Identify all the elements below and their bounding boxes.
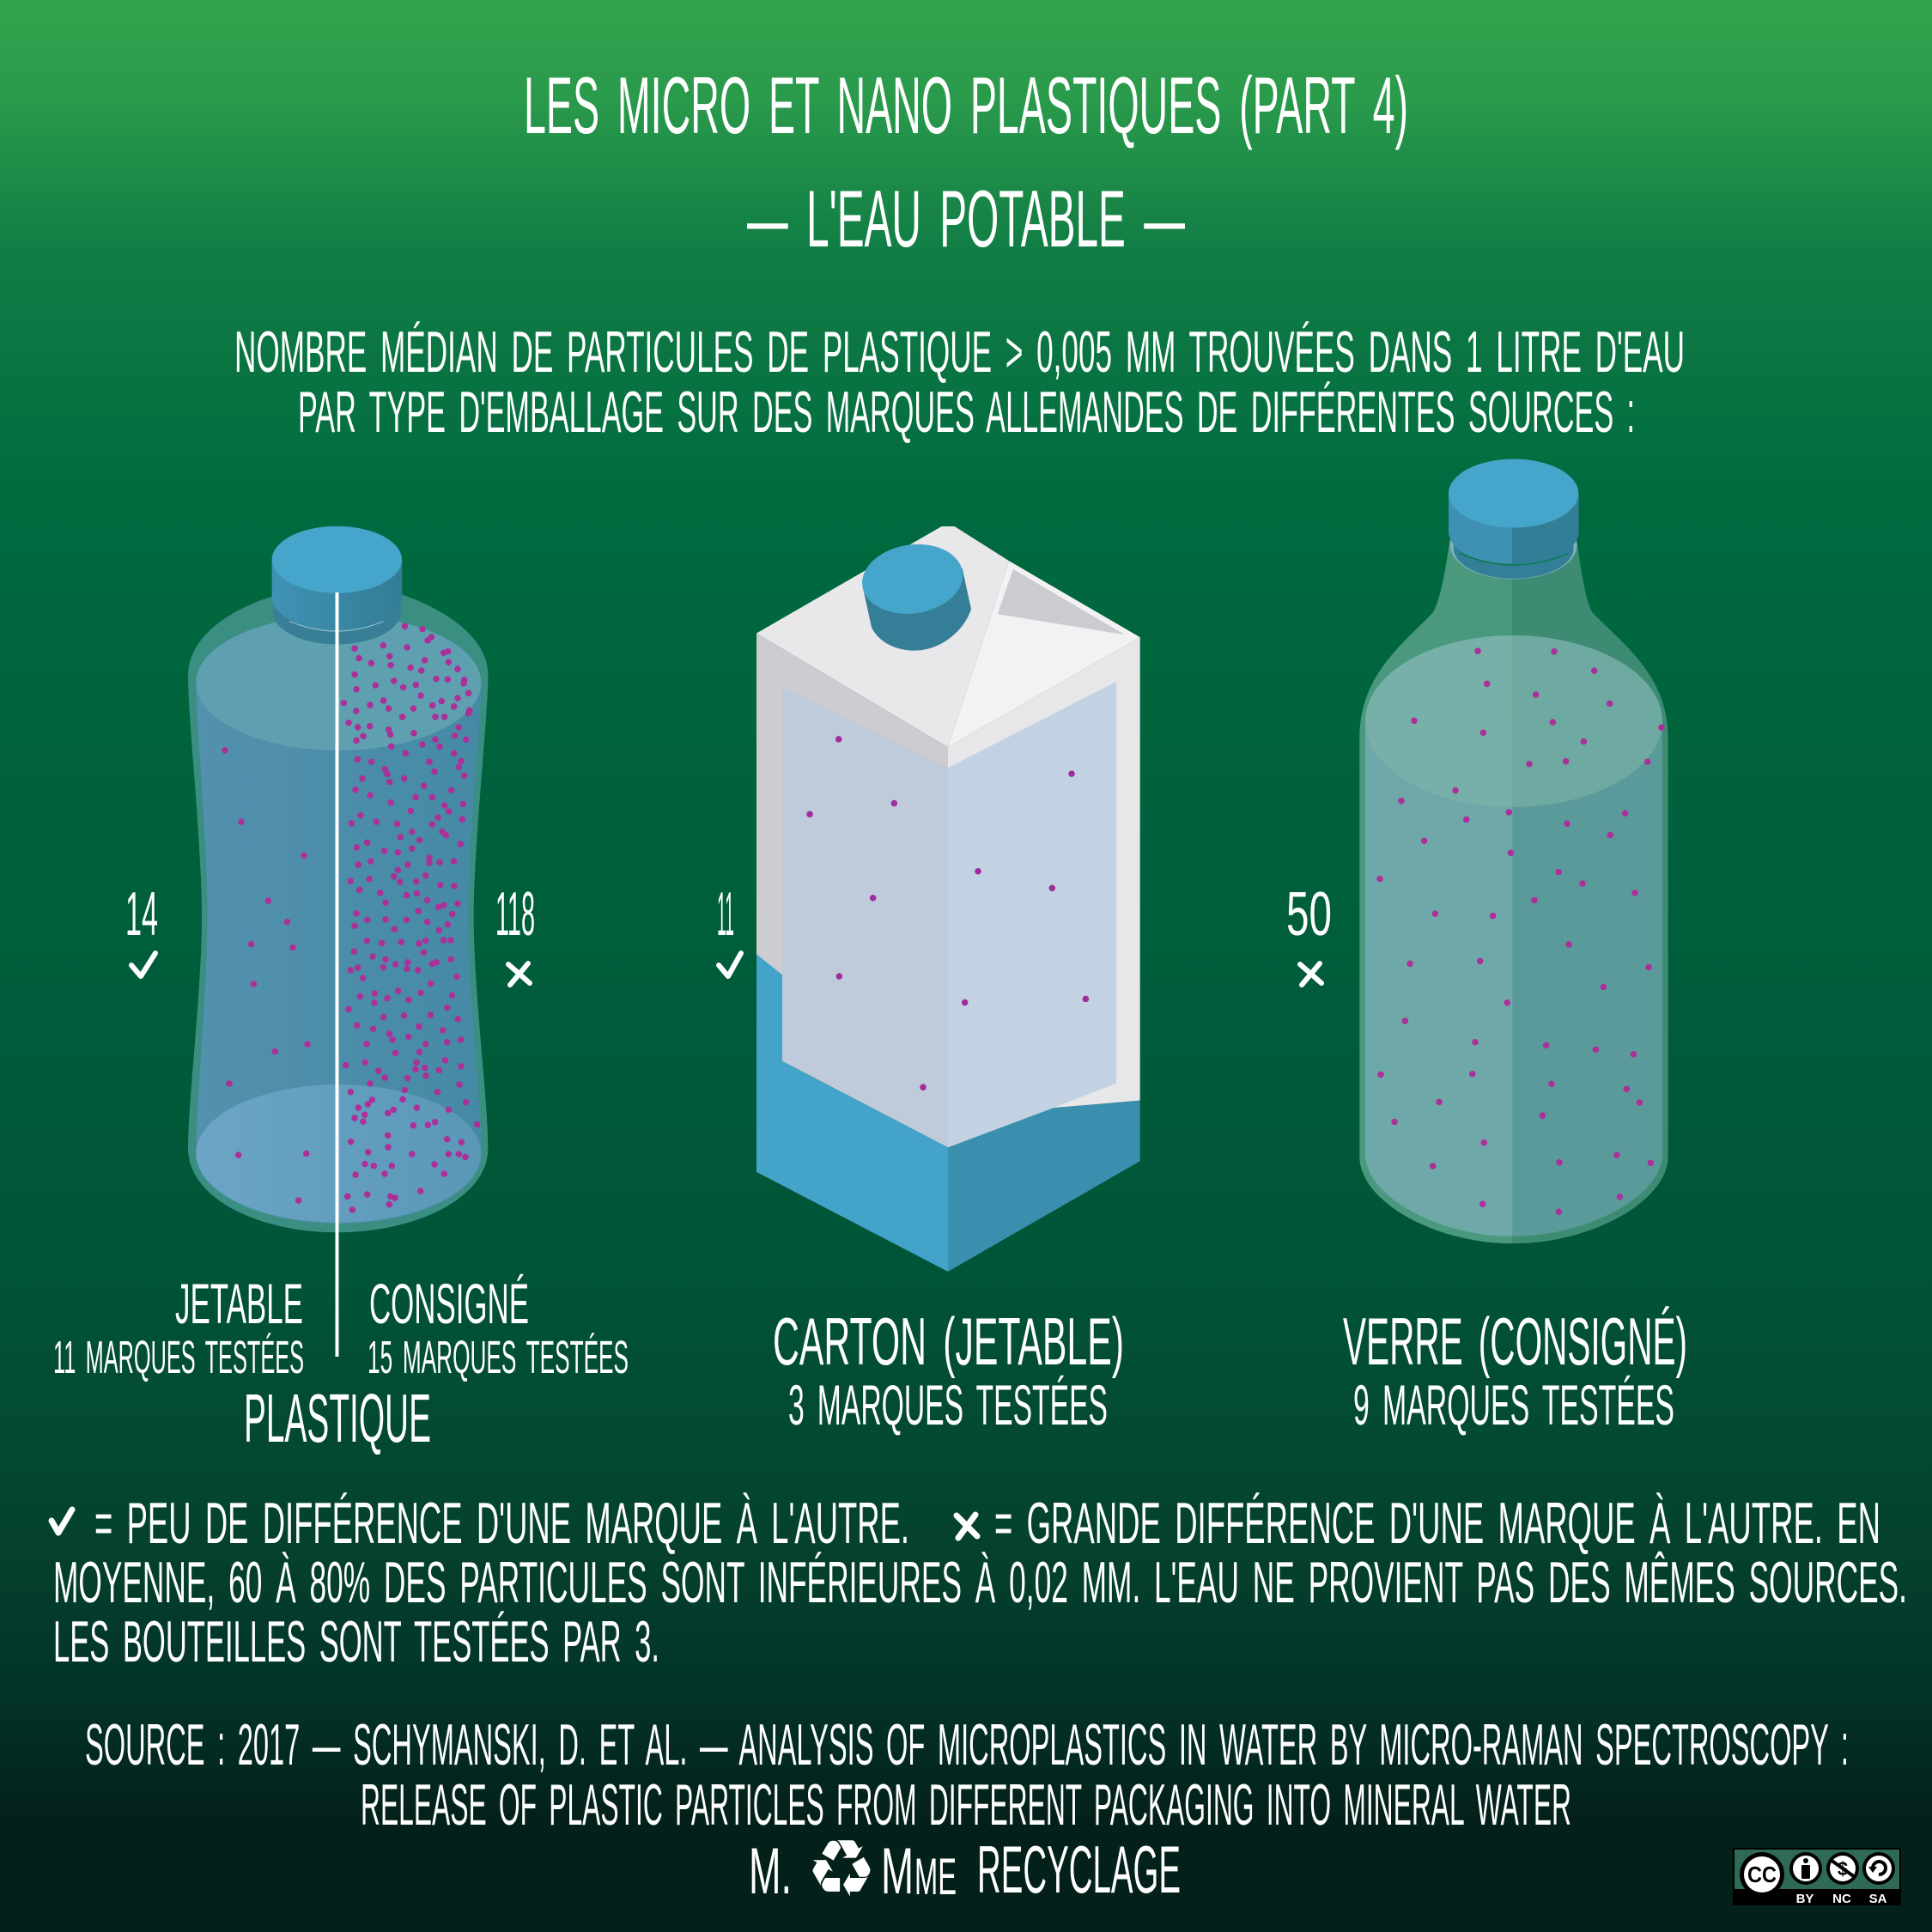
number: 50 with cross: [1286, 880, 1332, 985]
carton cap top: [861, 540, 963, 618]
icon: creative commons licence badge: NC: [1832, 1892, 1851, 1906]
glass collar inner: [1454, 517, 1574, 579]
legend and notes text block: [52, 1491, 1907, 1674]
glass shell left: [1359, 540, 1513, 1243]
label: carton: CARTON (JETABLE): [773, 1303, 1124, 1379]
title: — L'EAU POTABLE —: [747, 173, 1185, 264]
particles: disposable plastic: [225, 750, 307, 1200]
signature: m. mme recyclage: M: [881, 1835, 914, 1908]
icon: creative commons licence badge: BY: [1796, 1892, 1814, 1906]
window left: [782, 687, 948, 1147]
divider line between disposable and returnable: [335, 592, 338, 1357]
glass cap rim line: [1460, 553, 1569, 565]
text: 118: [495, 880, 535, 949]
roof fold: [998, 569, 1125, 635]
number: 118 with cross: [495, 880, 535, 985]
water right: [948, 1101, 1140, 1272]
window right: [948, 682, 1116, 1147]
label: plastic jetable: JETABLE: [175, 1272, 303, 1335]
text: RECYCLAGE: [977, 1832, 1181, 1907]
number: 50 with cross: 50: [1286, 880, 1332, 949]
text: 15 MARQUES TESTÉES: [368, 1332, 629, 1383]
number: 14 with check: [125, 880, 158, 976]
water body: [196, 682, 482, 1224]
text: 11: [717, 880, 734, 949]
bottle cap top: [272, 526, 402, 593]
bottle cap side: [272, 560, 402, 630]
title: [524, 60, 1408, 264]
subtitle text block: [234, 319, 1685, 445]
legend and notes text block: = PEU DE DIFFÉRENCE D'UNE MARQUE À L'AUTRE.: [94, 1491, 909, 1556]
glass cap side left: [1449, 494, 1512, 565]
carton right side: [948, 637, 1140, 1147]
glass collar: [1450, 512, 1577, 580]
number: 11 with check: [717, 880, 741, 976]
particles: glass: [1380, 651, 1662, 1212]
particles: returnable plastic: [343, 626, 477, 1210]
icon: creative commons licence badge: [1733, 1848, 1901, 1906]
icon: creative commons licence badge: SA: [1869, 1892, 1887, 1906]
signature: m. mme recyclage: M.: [749, 1835, 792, 1908]
icon: creative commons licence badge: $: [1838, 1858, 1848, 1880]
cap highlight: [289, 622, 384, 631]
label: carton: [773, 1303, 1124, 1437]
glass water left: [1365, 722, 1513, 1236]
signature: m. mme recyclage: ME: [914, 1848, 957, 1905]
water left: [756, 954, 948, 1272]
glass cap top: [1449, 459, 1578, 528]
label: plastic jetable: [53, 1272, 304, 1383]
label: carton: 3 MARQUES TESTÉES: [788, 1373, 1108, 1437]
signature: m. mme recyclage: [749, 1823, 1181, 1915]
bottle base: [196, 1084, 481, 1223]
bottle collar: [272, 579, 401, 644]
label: plastic consigné: [368, 1272, 629, 1383]
icon: recycling symbol: ♻: [806, 1823, 877, 1915]
glass surface left: [1365, 635, 1513, 807]
label: plastic consigné: CONSIGNÉ: [369, 1272, 529, 1335]
label: verre: [1343, 1303, 1687, 1437]
glass surface right: [1513, 635, 1662, 807]
particles: carton: [810, 739, 1085, 1087]
text: 11 MARQUES TESTÉES: [53, 1332, 304, 1383]
carton left side: [756, 634, 948, 1147]
panel: glass bottle: [1359, 459, 1668, 1243]
carton cap side: [863, 568, 971, 651]
text: 14: [125, 880, 158, 949]
glass cap side right: [1512, 494, 1579, 565]
text: PLASTIQUE: [244, 1380, 431, 1456]
icon: creative commons licence badge: CC: [1747, 1862, 1777, 1887]
carton roof right: [948, 561, 1140, 747]
bottle shell: [188, 594, 488, 1232]
glass water right: [1513, 722, 1662, 1236]
carton roof left: [756, 526, 1009, 747]
water surface: [196, 616, 481, 750]
panel: carton: [756, 526, 1140, 1272]
panel: plastic bottle: [188, 526, 488, 1232]
glass shell right: [1513, 540, 1668, 1243]
legend and notes text block: LES BOUTEILLES SONT TESTÉES PAR 3.: [53, 1609, 659, 1674]
source text block: [85, 1712, 1849, 1838]
